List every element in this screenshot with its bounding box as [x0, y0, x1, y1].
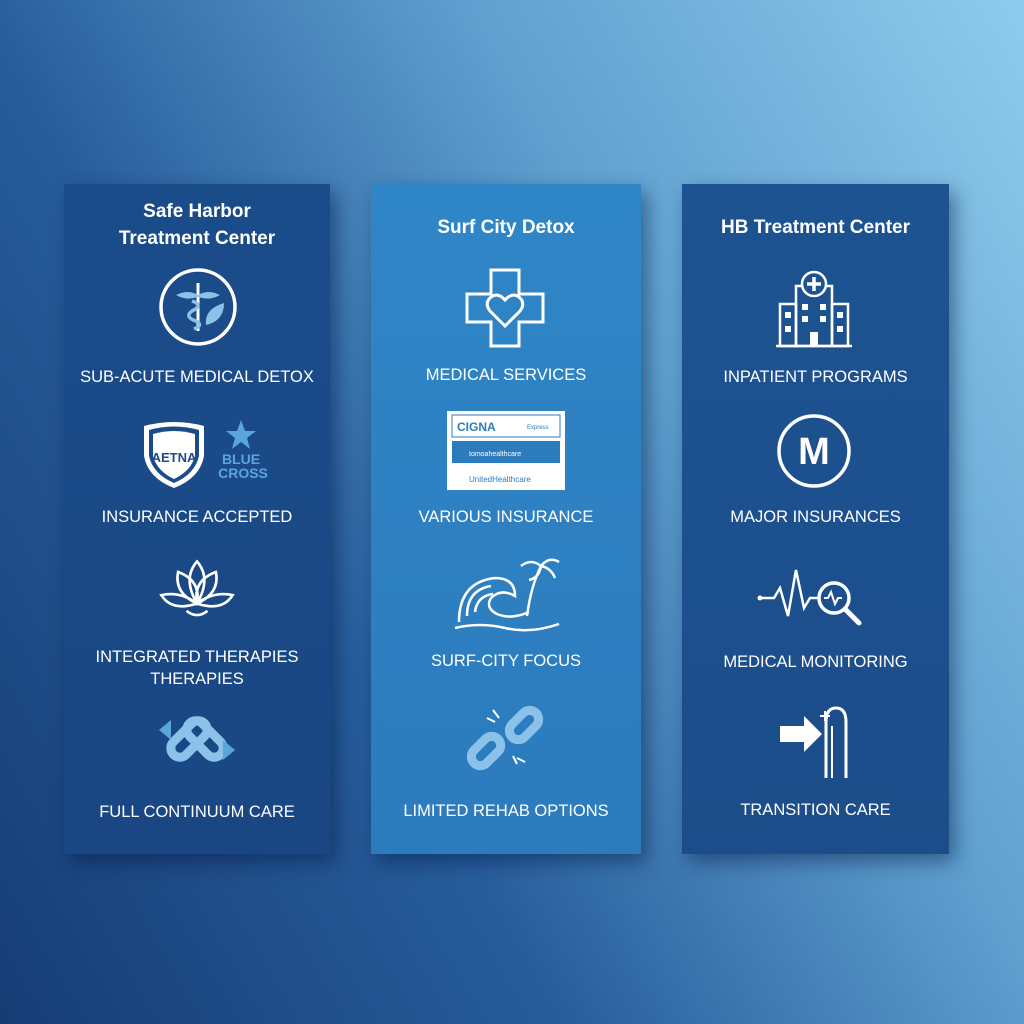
- icon: insurance logos: [144, 420, 268, 488]
- icon: wave palm: [454, 558, 560, 632]
- label: FULL CONTINUUM CARE: [99, 803, 295, 821]
- label: INSURANCE ACCEPTED: [102, 508, 292, 526]
- panel: HB Treatment Center: [682, 184, 949, 854]
- label: INTEGRATED THERAPIES: [96, 648, 298, 666]
- heading: Safe Harbor: [143, 201, 251, 222]
- label: VARIOUS INSURANCE: [419, 508, 593, 526]
- heading: HB Treatment Center: [721, 217, 910, 238]
- icon: transition: [780, 706, 848, 778]
- panel: Surf City Detox: [371, 184, 641, 854]
- icon: chain continuum: [159, 716, 235, 762]
- label: MEDICAL SERVICES: [426, 366, 586, 384]
- icon: insurance logos: BLUE: [222, 451, 260, 467]
- label: MEDICAL MONITORING: [723, 653, 908, 671]
- icon: insurance card: [447, 411, 565, 490]
- icon: M circle: M: [798, 431, 830, 473]
- icon: insurance card: CIGNA: [457, 420, 496, 434]
- label: SURF-CITY FOCUS: [431, 652, 581, 670]
- label: LIMITED REHAB OPTIONS: [403, 802, 609, 820]
- heading: [119, 201, 275, 249]
- icon: caduceus leaf: [159, 268, 237, 346]
- label: THERAPIES: [150, 670, 244, 688]
- label: TRANSITION CARE: [740, 801, 891, 819]
- label: [96, 648, 298, 688]
- icon: cross with heart: [466, 268, 544, 348]
- icon: lotus: [159, 560, 235, 616]
- panel: Safe Harbor: [64, 184, 330, 854]
- icon: M circle: [777, 414, 851, 488]
- icon: insurance logos: AETNA: [152, 450, 197, 465]
- label: INPATIENT PROGRAMS: [723, 368, 908, 386]
- icon: insurance card: tomoahealthcare: [469, 451, 521, 458]
- icon: monitoring: [758, 570, 862, 626]
- icon: insurance card: UnitedHealthcare: [469, 475, 531, 484]
- label: SUB-ACUTE MEDICAL DETOX: [80, 368, 314, 386]
- label: MAJOR INSURANCES: [730, 508, 901, 526]
- icon: insurance card: Express: [527, 425, 549, 431]
- icon: broken chain: [466, 706, 544, 770]
- icon: hospital building: [776, 270, 852, 348]
- icon: insurance logos: CROSS: [218, 465, 268, 481]
- heading: Treatment Center: [119, 228, 275, 249]
- heading: Surf City Detox: [437, 217, 575, 238]
